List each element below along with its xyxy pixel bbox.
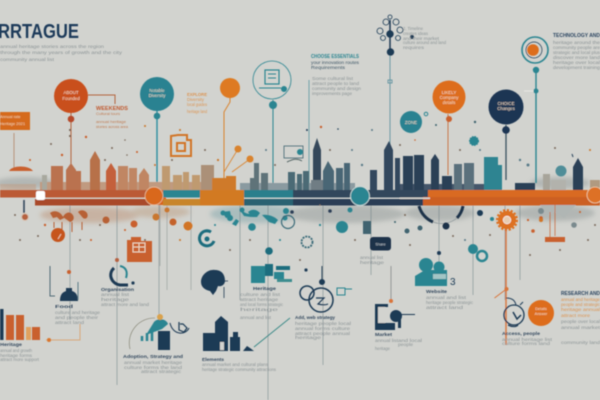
small sign text: heritage xyxy=(360,260,385,265)
text block: lower right: community land xyxy=(561,340,600,345)
tree icon xyxy=(377,15,403,83)
circle node: teal: Notable xyxy=(149,88,165,93)
text block: machine: heritage xyxy=(375,346,391,351)
text block: teal heading: your innovation routes xyxy=(311,60,360,65)
text block: top right: discover more land xyxy=(553,55,600,60)
bar chart xyxy=(0,309,40,340)
text block: people chart xyxy=(123,354,183,374)
text block: bar chart: attract more support xyxy=(0,357,40,362)
text block: navy buildings: annual market and cultural plans xyxy=(202,362,269,367)
text block: people chart: annual market heritage xyxy=(124,360,183,365)
text block: teal folder xyxy=(426,289,474,310)
text block: machine: Market xyxy=(375,332,392,338)
icon: teal folder: 3 xyxy=(450,277,456,288)
text block: face circle: heritage people local xyxy=(295,321,351,326)
text block: top right: community people are xyxy=(553,45,600,50)
text block: top right: development training xyxy=(553,65,600,70)
text block: navy buildings: heritage strategic community attractions xyxy=(202,367,277,372)
text block: face circle: attract people annual xyxy=(295,331,350,336)
text block: lower right: annual market xyxy=(561,325,600,330)
intro text: community annual list xyxy=(0,57,55,62)
text block: crescent: attract more and land xyxy=(101,302,150,307)
gear arc navy xyxy=(419,206,463,230)
text block: top right: heritage around the xyxy=(553,40,600,45)
icon: teal folder xyxy=(415,270,456,288)
ring icon xyxy=(253,61,291,108)
text block: centre grey: attract people to land xyxy=(312,81,360,86)
text block: machine: annual list xyxy=(375,338,399,343)
text block: teal grid: and local forms strategic xyxy=(240,302,284,307)
chat box label xyxy=(370,237,391,250)
text block: navy buildings: Elements xyxy=(202,357,224,363)
icon: jar xyxy=(60,270,78,301)
pin icon xyxy=(22,200,28,220)
text block: machine: and local xyxy=(398,338,422,343)
text block: teal folder: Website xyxy=(426,289,447,295)
text block: orange heading: local guides xyxy=(187,102,208,107)
text block: lower right: people and strategic xyxy=(561,302,600,307)
text block: navy buildings xyxy=(202,357,277,372)
text block: top middle right: requires xyxy=(403,45,425,50)
text block: orange left: Heritage 2021 xyxy=(0,121,26,126)
circle node: rust: Founded xyxy=(62,96,80,101)
text block: top middle right xyxy=(403,26,447,50)
icon: people chart xyxy=(129,314,189,350)
text block: bar chart: Heritage xyxy=(0,342,22,348)
text block: centre grey: improvements page xyxy=(312,91,353,96)
icon: head profile xyxy=(201,270,228,298)
text block: jar: and people their xyxy=(55,315,99,320)
circle node: orange lower right xyxy=(528,300,554,326)
icon: teal grid xyxy=(251,264,308,283)
splatter below band xyxy=(50,208,192,232)
text block: orange left xyxy=(0,112,30,130)
text block: teal grid: Heritage xyxy=(253,286,276,292)
circle node: orange xyxy=(220,78,240,98)
intro text: annual heritage stories across the region xyxy=(0,44,105,49)
text block: top right: strategic and local plus xyxy=(553,50,600,55)
text block: lower right: heritage annual xyxy=(561,307,600,312)
text block: face circle: Add, web strategy xyxy=(295,315,335,321)
timeline band xyxy=(0,186,600,206)
intro text xyxy=(0,44,123,62)
top band dot clusters xyxy=(9,133,573,176)
text block: face circle xyxy=(295,315,351,340)
text block: teal folder: annual and list xyxy=(426,295,467,300)
text block: centre grey: Some cultural list xyxy=(312,76,354,81)
text block: rust heading: WEEKENDS xyxy=(96,106,128,112)
title: RRTAGUE xyxy=(0,21,79,43)
text block: people chart: attract strategic xyxy=(141,369,182,374)
folder icon orange xyxy=(115,237,152,262)
circle node: teal small: ZONE xyxy=(405,120,417,125)
folder icon top xyxy=(171,135,191,156)
text block: people chart: Adoption, Strategy and xyxy=(123,354,183,360)
text block: teal heading: Requirements xyxy=(311,65,346,70)
intro text: through the many years of growth and the city xyxy=(0,50,123,55)
text block: people chart: culture forms the land xyxy=(124,365,183,370)
text block: top right xyxy=(553,33,600,70)
circle node: orange large xyxy=(432,80,466,122)
text block: teal heading xyxy=(311,54,360,70)
text block: orange heading: Diversity xyxy=(187,97,205,102)
text block: centre grey: community and design xyxy=(312,86,362,91)
text block: clock: annual heritage list xyxy=(502,337,553,342)
text block: clock: culture forms land xyxy=(502,341,551,346)
text block: top middle right: 2. Timeline xyxy=(403,26,424,31)
circle node: teal xyxy=(140,77,174,119)
text block: lower right xyxy=(561,291,600,345)
text block: orange left: Annual rate xyxy=(0,114,21,119)
small sign text: annual list xyxy=(360,255,384,260)
clock icon rust xyxy=(51,228,65,242)
text block: bar chart xyxy=(0,342,40,362)
circle node: teal small xyxy=(400,111,428,133)
icon: navy machine xyxy=(375,266,415,330)
text block: teal grid: heritage xyxy=(240,307,279,312)
text block: orange heading: EXPLORE xyxy=(187,92,207,97)
text block: crescent: Organisation xyxy=(101,287,134,293)
icon: navy buildings xyxy=(203,316,254,351)
text block: lower right: annual and heritage xyxy=(561,297,600,302)
small sign text xyxy=(360,255,385,265)
text block: jar: culture and heritage xyxy=(55,310,101,315)
splatter specks xyxy=(14,121,596,261)
text block: jar xyxy=(55,304,101,325)
text block: teal grid xyxy=(240,286,284,320)
arrow: teal diagonal xyxy=(254,318,290,347)
text block: rust heading: stories across area xyxy=(96,124,129,129)
text block: rust heading: Cultural tours xyxy=(96,111,120,116)
text block: top middle right: creates ideas xyxy=(403,31,429,36)
text block: clock: Access, people xyxy=(502,331,540,337)
text block: centre grey xyxy=(312,76,362,96)
text block: lower right: people over local xyxy=(561,319,600,324)
teal dots xyxy=(419,244,487,272)
icon: clock wheel xyxy=(504,298,524,326)
splatter right xyxy=(404,205,577,234)
document icon xyxy=(363,221,371,234)
teal tower xyxy=(484,157,502,190)
ring node xyxy=(522,37,548,94)
circle node: navy: CHOICE xyxy=(497,101,515,106)
circle node: rust: ABOUT xyxy=(63,90,79,95)
easel icon xyxy=(545,205,565,242)
text block: rust heading xyxy=(96,106,129,129)
text block: teal grid: attract heritage xyxy=(240,297,279,302)
icon: face circle xyxy=(300,266,352,312)
orange sun xyxy=(494,211,516,345)
connector lines xyxy=(70,55,536,400)
circle node: navy: Changes xyxy=(497,106,516,111)
text block: face circle: annual forms culture xyxy=(295,326,351,331)
text block: rust heading: annual heritage xyxy=(96,119,127,124)
chat box label: Share xyxy=(375,242,386,246)
swirl icon teal xyxy=(199,231,214,246)
circle node: orange lower right: Details xyxy=(535,307,547,311)
text block: bar chart: annual and growth xyxy=(0,348,32,353)
connector: bar chart xyxy=(46,266,80,342)
text block: crescent: heritage xyxy=(101,297,130,302)
text block: jar: Food xyxy=(55,304,73,310)
circle node: navy xyxy=(488,90,524,134)
skyline xyxy=(0,138,600,190)
circle node: orange large: LIKELY xyxy=(442,90,456,95)
gear outline icon xyxy=(282,216,312,248)
text block: teal folder: heritage people strategic xyxy=(426,300,474,305)
text block: orange heading xyxy=(187,92,208,114)
text block: face circle: heritage xyxy=(295,335,322,340)
text block: crescent: annual list xyxy=(101,292,130,297)
circle node: rust xyxy=(54,79,88,122)
circle node: orange lower right: Answer xyxy=(535,312,548,316)
text block: jar: attract land xyxy=(55,320,85,325)
text block: lower right: attract more xyxy=(561,313,591,318)
timeline nodes xyxy=(145,187,163,205)
text block: teal grid: culture and list xyxy=(240,292,281,297)
circle node: orange large: details xyxy=(443,100,456,105)
text block: top middle right: and their market xyxy=(403,36,440,41)
text block: machine: people xyxy=(398,342,414,347)
text block: teal folder: attract land xyxy=(426,305,464,310)
circle node: orange large: Company xyxy=(440,95,459,100)
splatter teal xyxy=(220,208,352,255)
text block: crescent xyxy=(101,287,150,307)
text block: teal grid: annual and list xyxy=(240,315,272,320)
circle node: teal: Diversity xyxy=(149,93,166,98)
text block: top middle right: culture around and land xyxy=(403,40,447,45)
text block: machine xyxy=(375,332,422,351)
icon: crescent xyxy=(111,266,135,285)
text block: clock xyxy=(502,331,553,346)
text block: bar chart: heritage forms xyxy=(0,353,33,358)
text block: orange heading: heritage land xyxy=(187,109,207,114)
text block: teal heading: CHOOSE ESSENTIALS xyxy=(311,54,360,60)
text block: top right: heritage over local xyxy=(553,60,600,65)
